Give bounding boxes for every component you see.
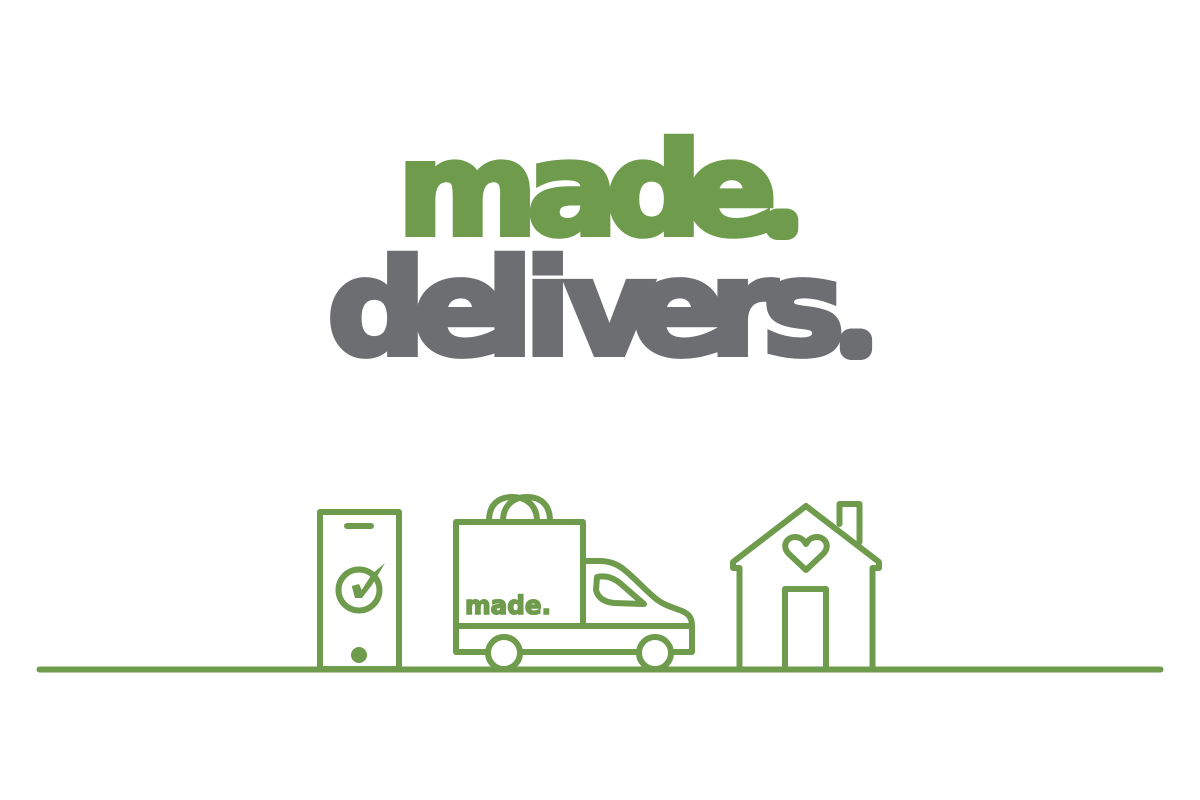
van window (596, 576, 644, 604)
chimney (840, 504, 860, 542)
bag handles (489, 497, 550, 521)
title: made.: . (772, 183, 792, 242)
door (785, 589, 826, 669)
rear wheel (639, 637, 671, 669)
roof and walls (733, 506, 879, 669)
title: made.: made (397, 115, 777, 264)
icon: smartphone with check mark (320, 512, 399, 669)
bag body (456, 522, 583, 626)
icon: delivery van carrying shopping bag (456, 497, 692, 669)
title: delivers.: . (846, 303, 866, 362)
front wheel (488, 637, 520, 669)
icon: house with heart (733, 504, 879, 669)
heart (785, 537, 827, 570)
van cab outline (456, 561, 692, 652)
title: delivers.: delivers (327, 231, 845, 385)
bag logo: made.: made. (465, 591, 551, 621)
ground line (40, 666, 1160, 672)
